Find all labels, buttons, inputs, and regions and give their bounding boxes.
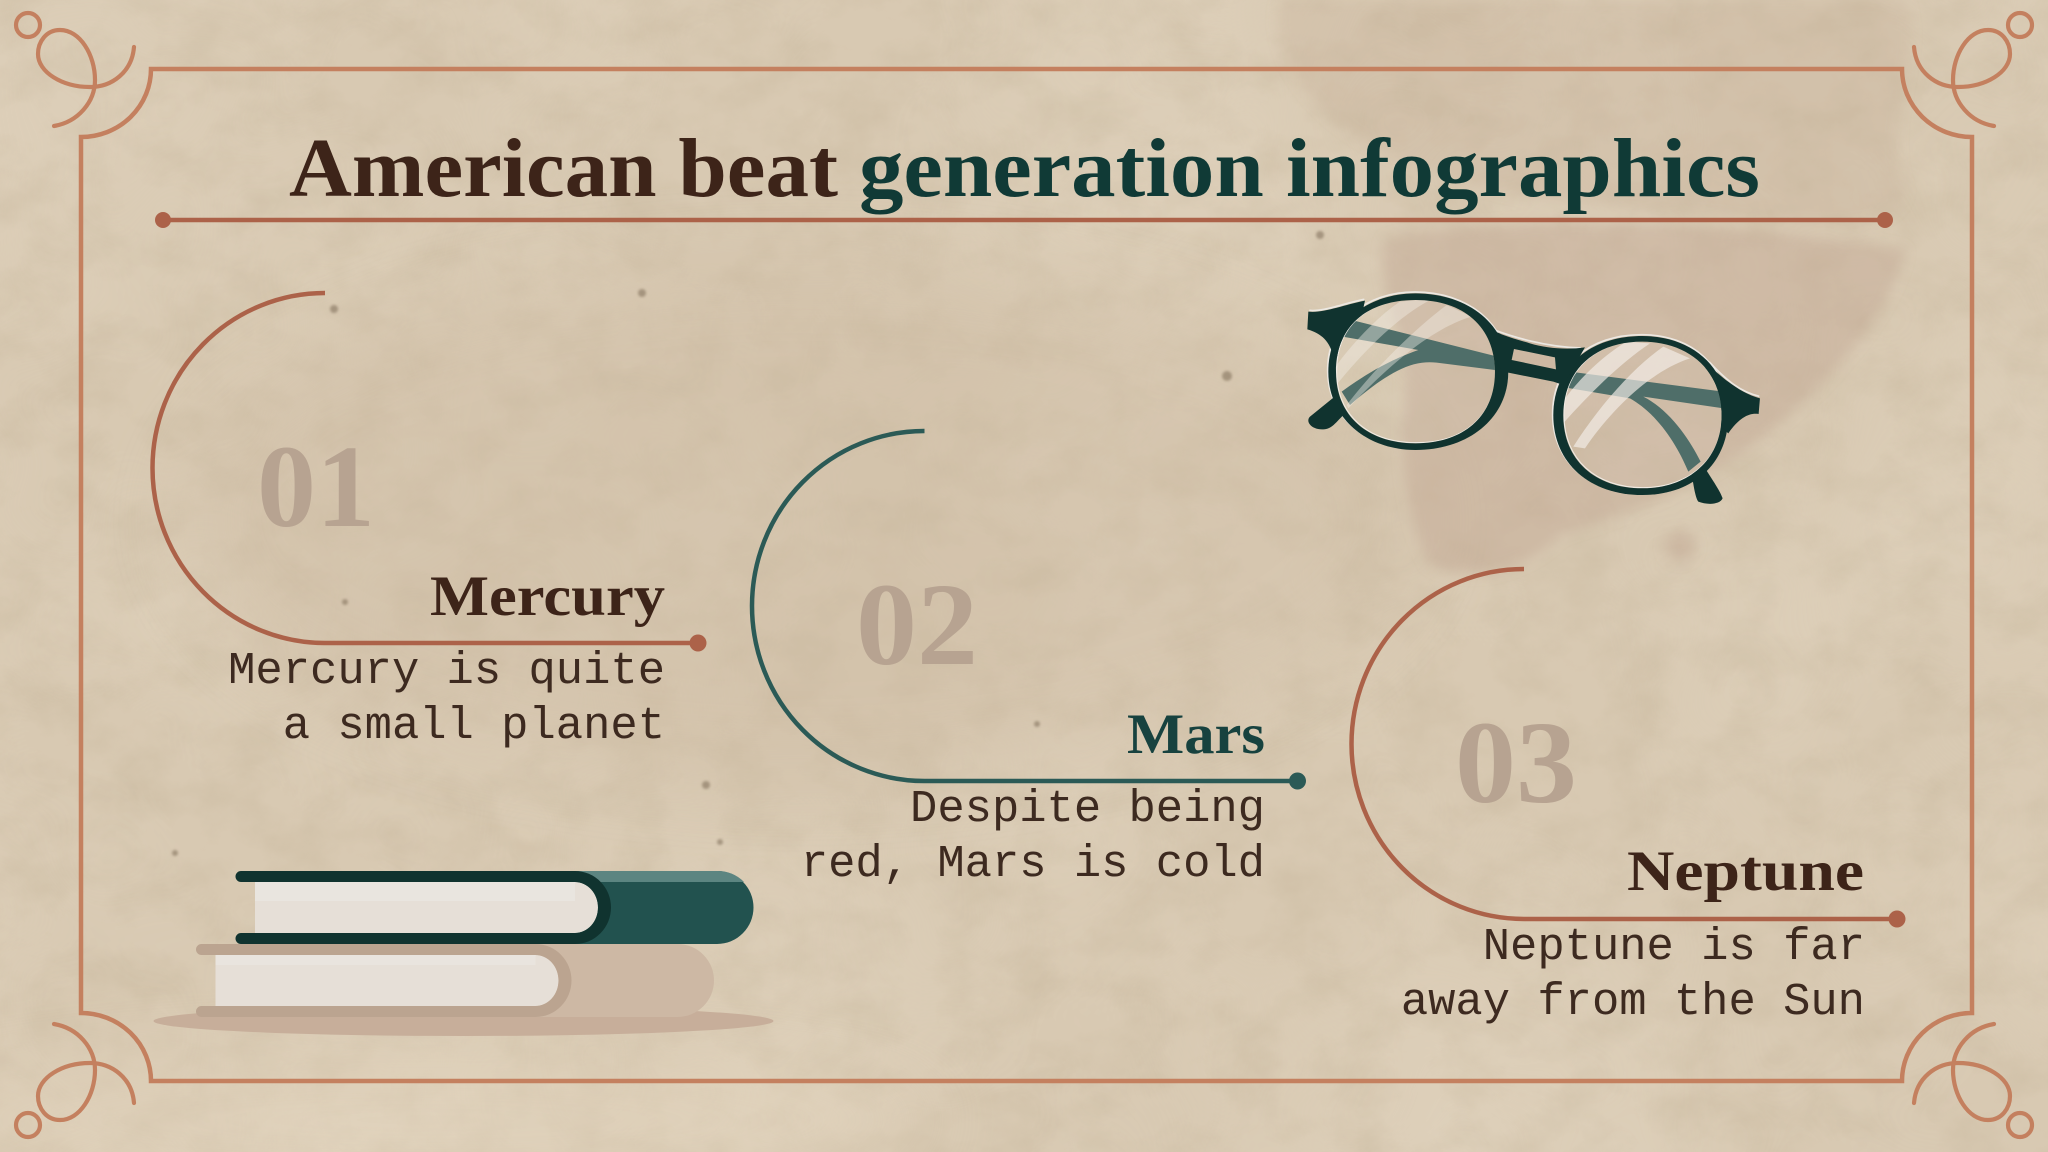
panel: 02 Mars	[752, 431, 1306, 890]
illustration: round glasses	[1307, 291, 1760, 504]
number 01: 01	[257, 421, 375, 552]
right lens glare	[1562, 342, 1690, 448]
title underline with end dots	[155, 212, 1893, 228]
frame highlight edge	[1309, 292, 1759, 494]
arc connector 02	[752, 431, 1306, 790]
heading Neptune: Neptune	[1627, 840, 1864, 903]
panel: 03 Neptune	[1352, 569, 1906, 1028]
panel: 01 Mercury	[152, 293, 706, 752]
frame	[1307, 293, 1760, 504]
description Mercury	[228, 645, 665, 752]
arc connector 01	[152, 293, 706, 652]
description Neptune	[1401, 921, 1865, 1028]
ornament: top-right corner	[1914, 13, 2032, 126]
temple arms seen through lenses	[1333, 318, 1723, 472]
illustration: stacked books	[154, 871, 774, 1036]
description Mars: red, Mars is cold	[801, 838, 1265, 890]
upper green book	[236, 871, 754, 944]
title	[289, 122, 1760, 215]
lens tint	[1280, 270, 1780, 537]
title: American beat	[289, 122, 838, 215]
description Mars	[801, 783, 1265, 890]
number 02: 02	[856, 559, 978, 690]
description Mercury: a small planet	[283, 700, 665, 752]
ornament: bottom-left corner	[16, 1024, 134, 1137]
lower beige book	[196, 944, 714, 1017]
book shadow	[154, 1006, 774, 1036]
ornament: bottom-right corner	[1914, 1024, 2032, 1137]
arc connector 03	[1352, 569, 1906, 928]
description Neptune: Neptune is far	[1483, 921, 1865, 973]
left lens glare	[1333, 298, 1472, 408]
title: generation infographics	[859, 122, 1760, 215]
lens inner rim highlight	[1337, 299, 1722, 488]
description Neptune: away from the Sun	[1401, 976, 1865, 1028]
ornament: top-left corner	[16, 13, 134, 126]
heading Mercury: Mercury	[430, 565, 665, 628]
heading Mars: Mars	[1127, 703, 1265, 766]
description Mars: Despite being	[910, 783, 1265, 835]
number 03: 03	[1455, 697, 1577, 828]
lens contents	[1336, 300, 1722, 488]
description Mercury: Mercury is quite	[228, 645, 665, 697]
